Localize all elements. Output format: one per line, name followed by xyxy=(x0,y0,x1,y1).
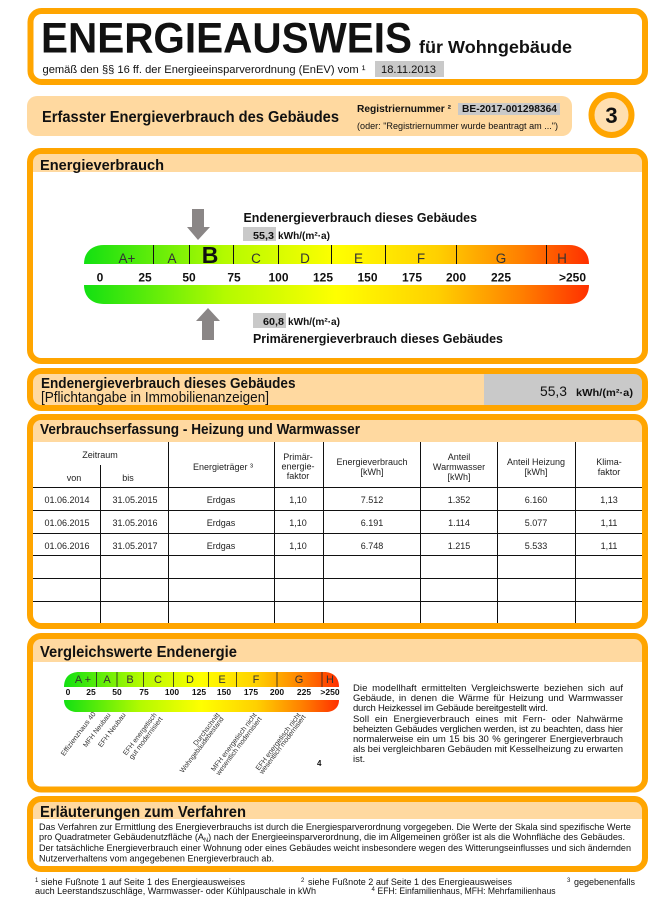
mini scale: classes: C xyxy=(154,674,162,686)
scale: energy classes: H xyxy=(557,251,567,266)
comparison explanation: normalerweise ein um 15 bis 30 % geringerer Energieverbrauch xyxy=(353,734,623,745)
table header: energie- xyxy=(281,462,315,472)
table row 2015/16: Erdgas xyxy=(207,518,236,528)
registration number field: BE-2017-001298364 xyxy=(462,104,557,115)
scale: numeric values: >250 xyxy=(559,270,586,284)
table header: Energieverbrauch xyxy=(336,457,408,467)
comparison explanation: ist. xyxy=(353,754,365,765)
footnotes: EFH: Einfamilienhaus, MFH: Mehrfamilienhaus xyxy=(378,886,556,897)
footnotes: auch Leerstandszuschläge, Warmwasser- oder Kühlpauschale in kWh xyxy=(35,886,316,897)
table row 2014/15: 1,13 xyxy=(600,495,618,505)
table row 2016/17: 01.06.2016 xyxy=(44,541,90,551)
table row 2015/16: 01.06.2015 xyxy=(44,518,90,528)
table header: Anteil Heizung xyxy=(507,457,565,467)
panel heading: Erläuterungen zum Verfahren xyxy=(40,804,246,821)
table row 2014/15 xyxy=(44,495,618,505)
scale: energy classes: A xyxy=(167,251,177,266)
table row 2016/17: 1,10 xyxy=(289,541,307,551)
scale: numeric values: 25 xyxy=(138,270,152,284)
panel: energy consumption xyxy=(30,151,645,361)
scale: numeric values: 225 xyxy=(491,270,511,284)
table row 2016/17 xyxy=(44,541,617,551)
mini scale: numbers xyxy=(66,687,340,697)
method text: N xyxy=(204,838,208,844)
table header: von xyxy=(67,473,81,483)
mini scale: numbers: 200 xyxy=(270,687,284,697)
primary energy value: 60,8 xyxy=(263,316,284,328)
panel heading: Energieverbrauch xyxy=(40,157,164,174)
scale: numeric values: 200 xyxy=(446,270,466,284)
footnotes: 4 xyxy=(372,887,376,893)
comparison explanation: Die modellhaft ermittelten Vergleichswerte beziehen sich auf xyxy=(353,683,623,694)
final energy label: Endenergieverbrauch dieses Gebäudes xyxy=(244,210,477,225)
mini scale: classes: F xyxy=(253,674,260,686)
footnote marker: 4 xyxy=(317,759,322,768)
panel: comparison values xyxy=(30,636,645,790)
comparison explanation: beheizten Gebäudes verglichen werden, ist zu beachten, dass hier xyxy=(353,724,623,735)
scale: energy classes: B xyxy=(202,242,218,268)
mini scale: numbers: 125 xyxy=(192,687,206,697)
panel: title xyxy=(30,11,645,82)
rotated comparison labels: gut modernisiert xyxy=(128,716,165,761)
method text: pro Quadratmeter Gebäudenutzfläche (A xyxy=(39,832,211,843)
date field: 18.11.2013 xyxy=(381,64,436,76)
table header: faktor xyxy=(287,471,309,481)
footnotes: siehe Fußnote 1 auf Seite 1 des Energieausweises xyxy=(41,877,245,888)
rotated comparison labels: EFH energetisch nicht xyxy=(255,712,303,772)
mini scale: classes: G xyxy=(295,674,303,686)
mini scale: numbers: >250 xyxy=(320,687,340,697)
table row 2014/15: 1,10 xyxy=(289,495,307,505)
table header: [kWh] xyxy=(524,467,548,477)
method text xyxy=(39,822,631,864)
registration note: (oder: "Registriernummer wurde beantragt am ...") xyxy=(357,121,558,131)
scale: energy classes: F xyxy=(417,251,425,266)
table row 2015/16: 31.05.2016 xyxy=(112,518,158,528)
arrow: primary energy marker xyxy=(196,308,220,340)
table header: Anteil xyxy=(448,452,470,462)
registration label: Registriernummer ² xyxy=(357,104,452,115)
mini scale: numbers: 100 xyxy=(165,687,179,697)
final energy value xyxy=(243,227,330,242)
table row 2015/16: 5.077 xyxy=(525,518,547,528)
mini scale: lower gradient bar xyxy=(64,700,339,712)
table row 2015/16: 1.114 xyxy=(448,518,470,528)
subtitle: für Wohngebäude xyxy=(419,37,572,57)
mini scale: numbers: 75 xyxy=(139,687,149,697)
mini scale: classes: H xyxy=(326,674,334,686)
scale: energy classes: G xyxy=(496,251,506,266)
final energy value: kWh/(m²·a) xyxy=(278,230,330,242)
rotated comparison labels: Effizienzhaus 40 xyxy=(60,711,98,758)
panel: consumption record xyxy=(30,417,645,626)
scale: energy classes: A+ xyxy=(119,251,136,266)
mini scale: classes: D xyxy=(186,674,194,686)
table row 2014/15: 6.160 xyxy=(525,495,547,505)
mini scale: classes: A + xyxy=(75,674,91,686)
scale: numeric values: 0 xyxy=(97,270,104,284)
method text: ) nach der Energieeinsparverordnung, die im Allgemeinen größer ist als die Wohnfläche des Gebäudes. xyxy=(208,832,625,843)
rotated comparison labels: wesentlich modernisiert xyxy=(258,714,308,776)
scale: energy classes: E xyxy=(354,251,363,266)
mandatory value number: kWh/(m²·a) xyxy=(576,388,633,399)
mini scale: classes xyxy=(64,672,339,687)
table row 2016/17: 5.533 xyxy=(525,541,547,551)
panel heading: Verbrauchserfassung - Heizung und Warmwasser xyxy=(40,421,360,438)
page number circle xyxy=(592,95,632,135)
panel: mandatory value xyxy=(30,371,645,408)
mandatory value heading: Endenergieverbrauch dieses Gebäudes xyxy=(41,376,296,392)
section heading: Erfasster Energieverbrauch des Gebäudes xyxy=(42,109,339,126)
footnotes: 3 xyxy=(567,878,571,884)
panel: registration bar xyxy=(27,96,572,136)
mini scale: numbers: 150 xyxy=(217,687,231,697)
table header: [kWh] xyxy=(360,467,384,477)
table row 2016/17: 31.05.2017 xyxy=(112,541,158,551)
scale: lower gradient bar xyxy=(84,285,589,304)
scale: energy classes xyxy=(84,242,589,268)
table row 2014/15: 1.352 xyxy=(448,495,470,505)
mini scale: classes: A xyxy=(103,674,111,686)
footnotes: gegebenenfalls xyxy=(574,877,635,888)
rotated comparison labels: wesentlich modernisiert xyxy=(215,716,264,778)
scale: numeric values: 50 xyxy=(182,270,196,284)
rotated comparison labels: Durchschnitt xyxy=(193,712,222,747)
scale: numeric values: 125 xyxy=(313,270,333,284)
rotated comparison labels: MFH energetisch nicht xyxy=(210,712,259,773)
table header: Klima- xyxy=(596,457,622,467)
mandatory value number: 55,3 xyxy=(540,383,567,399)
scale: numeric values: 75 xyxy=(227,270,241,284)
mini scale: classes: B xyxy=(126,674,134,686)
rotated comparison labels: Wohngebäudebestand xyxy=(179,716,226,775)
panel heading: Vergleichswerte Endenergie xyxy=(40,644,237,661)
rotated comparison labels xyxy=(60,711,308,778)
method text: Das Verfahren zur Ermittlung des Energieverbrauchs ist durch die Energiesparverordnung vorgegeben. Die Werte der Skala sind spezifische Werte xyxy=(39,822,631,833)
table header: faktor xyxy=(598,467,620,477)
mini scale: classes: E xyxy=(218,674,226,686)
footnotes: siehe Fußnote 2 auf Seite 1 des Energieausweises xyxy=(308,877,512,888)
footnotes xyxy=(35,877,635,897)
comparison explanation: Gebäude, in denen die Wärme für Heizung und Warmwasser xyxy=(353,693,623,704)
scale: numeric values: 150 xyxy=(357,270,378,284)
method text: Nutzerverhaltens vom angegebenen Energieverbrauch ab. xyxy=(39,854,274,864)
mandatory value number xyxy=(540,383,633,399)
mini scale: numbers: 0 xyxy=(66,687,71,697)
table header: Energieträger ³ xyxy=(193,462,253,472)
comparison explanation: durch Heizkessel im Gebäude bereitgestellt wird. xyxy=(353,703,548,714)
scale: numeric values: 100 xyxy=(268,270,289,284)
mini scale: numbers: 50 xyxy=(112,687,122,697)
table row 2014/15: 7.512 xyxy=(361,495,383,505)
final energy value: 55,3 xyxy=(253,230,274,242)
table row 2016/17: 1,11 xyxy=(601,541,617,551)
method text: Der tatsächliche Energieverbrauch einer Wohnung oder eines Gebäudes weicht insbesondere wegen des Witterungseinflusses und sich ändernden xyxy=(39,843,631,854)
table row 2016/17: Erdgas xyxy=(207,541,236,551)
table row 2014/15: 01.06.2014 xyxy=(44,495,90,505)
table row 2016/17: 1.215 xyxy=(448,541,470,551)
mini scale: numbers: 175 xyxy=(244,687,258,697)
table row 2014/15: 31.05.2015 xyxy=(112,495,158,505)
table header: Warmwasser xyxy=(433,462,485,472)
primary energy label: Primärenergieverbrauch dieses Gebäudes xyxy=(253,331,503,346)
table row 2014/15: Erdgas xyxy=(207,495,236,505)
scale: numeric values xyxy=(97,270,586,284)
title: ENERGIEAUSWEIS xyxy=(41,14,412,62)
footnotes: 1 xyxy=(35,878,39,884)
table row 2016/17: 6.748 xyxy=(361,541,383,551)
rotated comparison labels: MFH Neubau xyxy=(82,712,113,749)
table header: Primär- xyxy=(283,452,313,462)
arrow: final energy marker xyxy=(187,209,210,240)
mandatory value note: [Pflichtangabe in Immobilienanzeigen] xyxy=(41,390,269,406)
legal basis line: gemäß den §§ 16 ff. der Energieeinsparverordnung (EnEV) vom ¹ xyxy=(42,64,366,76)
comparison explanation: Soll ein Energieverbrauch eines mit Fern- oder Nahwärme xyxy=(353,714,623,725)
table row 2015/16 xyxy=(44,518,617,528)
comparison explanation: als bei vergleichbaren Gebäuden mit Kesselheizung zu erwarten xyxy=(353,744,623,755)
primary energy value xyxy=(253,313,340,328)
table header: [kWh] xyxy=(447,472,471,482)
primary energy value: kWh/(m²·a) xyxy=(288,316,340,328)
date field xyxy=(375,61,444,77)
page number circle: 3 xyxy=(605,103,618,128)
scale: energy classes: C xyxy=(251,251,261,266)
rotated comparison labels: EFH energetisch xyxy=(122,712,159,757)
mini scale: numbers: 225 xyxy=(297,687,311,697)
table row 2015/16: 1,10 xyxy=(289,518,307,528)
table header: Zeitraum xyxy=(82,450,118,460)
scale: energy classes: D xyxy=(300,251,310,266)
comparison explanation xyxy=(353,683,623,765)
table row 2015/16: 1,11 xyxy=(601,518,617,528)
table header xyxy=(67,450,622,483)
scale: numeric values: 175 xyxy=(402,270,422,284)
table header: bis xyxy=(122,473,134,483)
mini scale: numbers: 25 xyxy=(86,687,96,697)
rotated comparison labels: EFH Neubau xyxy=(97,712,128,749)
footnotes: 2 xyxy=(301,878,305,884)
consumption table xyxy=(33,442,642,624)
panel: method explanation xyxy=(30,799,645,869)
table row 2015/16: 6.191 xyxy=(361,518,383,528)
